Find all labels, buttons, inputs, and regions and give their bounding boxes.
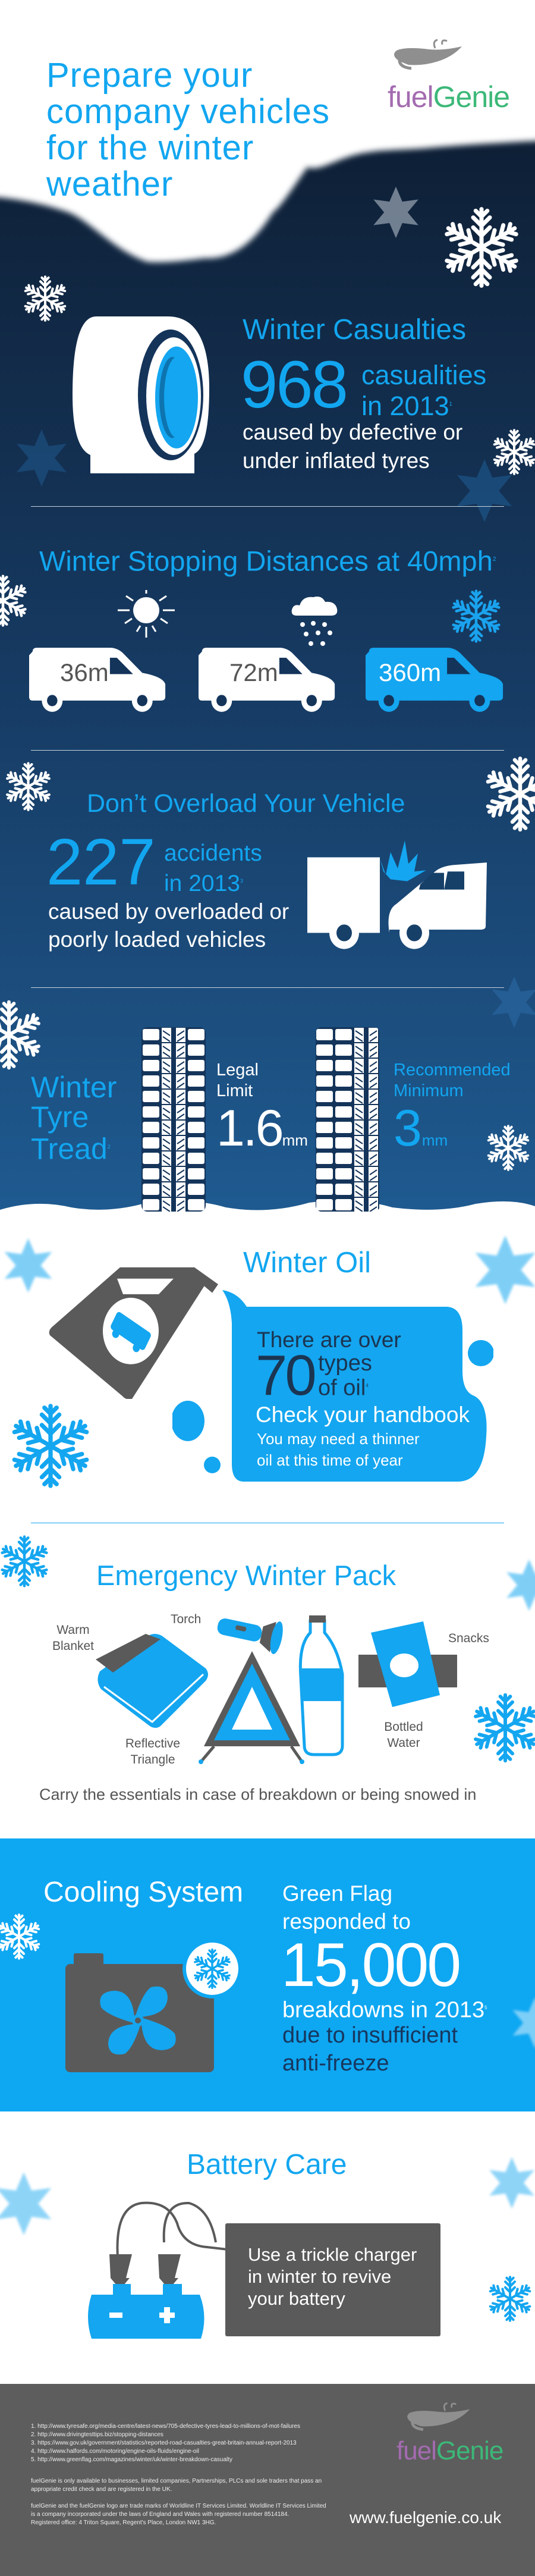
icon: van 36m: 36m (60, 658, 109, 686)
heading: winter oil: Winter Oil (243, 1247, 371, 1279)
text: legal limit (216, 1060, 308, 1157)
panel: overload stat (46, 826, 289, 952)
callout: oil speech bubble: Check your handbook (256, 1402, 470, 1427)
text: legal notes (31, 2478, 326, 2526)
panel: winter casualties text (241, 314, 486, 473)
title: company vehicles (46, 92, 330, 131)
panel: overload stat: in 20133 (164, 871, 243, 896)
background: cloud and decorative snowflakes (0, 0, 535, 1213)
heading: winter tyre tread: Tyre (31, 1100, 89, 1134)
icon: tyre (73, 316, 209, 473)
text: green flag stat (281, 1881, 487, 2076)
heading: cooling system title: Cooling System (43, 1877, 243, 1908)
text: recommended minimum: Minimum (394, 1081, 464, 1100)
text: Torch (171, 1612, 201, 1626)
panel: winter casualties text: in 20131 (361, 391, 452, 421)
panel: winter casualties text: Winter Casualties (243, 314, 466, 346)
text: legal limit: Limit (216, 1081, 253, 1100)
text: references: 1. http://www.tyresafe.org/media-centre/latest-news/705-defective-tyres-lead-to-millions-of-mot-failures (31, 2423, 300, 2430)
heading: stopping distances: Winter Stopping Distances at 40mph2 (39, 545, 496, 577)
panel: cooling system (0, 1838, 535, 2111)
icon: van 360m (366, 648, 503, 712)
text: green flag stat: due to insufficient (282, 2023, 458, 2048)
text: green flag stat: Green Flag (282, 1881, 392, 1906)
text: green flag stat: anti-freeze (282, 2051, 389, 2076)
text: Triangle (130, 1753, 175, 1767)
panel: dark winter background (0, 0, 535, 1213)
callout: oil speech bubble: 70 (256, 1344, 314, 1407)
triangle (204, 1651, 300, 1746)
labels: emergency items: Blanket (52, 1639, 94, 1653)
icon: van 72m (199, 648, 335, 712)
icon: van 360m: 360m (379, 658, 441, 686)
text: references: 4. http://www.halfords.com/motoring/engine-oils-fluids/engine-oil (31, 2448, 199, 2455)
text: carry essentials: Carry the essentials in case of breakdown or being snowed in (39, 1786, 476, 1803)
text: legal notes: appropriate credit check and are registered in the UK. (31, 2486, 172, 2493)
text: recommended minimum: Recommended (394, 1060, 511, 1080)
panel: winter casualties text: under inflated tyres (243, 448, 430, 473)
icon: van 36m (29, 648, 165, 712)
snacks (358, 1655, 457, 1687)
icon: van 72m: 72m (229, 658, 278, 686)
logo: footer fuelGenie (396, 2402, 503, 2465)
icon: sun (118, 590, 175, 638)
callout: oil speech bubble: You may need a thinner (257, 1430, 420, 1448)
panel: winter casualties text: caused by defective or (243, 420, 462, 444)
text: Bottled (384, 1720, 423, 1734)
callout: oil speech bubble (172, 1290, 493, 1482)
text: recommended minimum (394, 1060, 511, 1157)
bottle (300, 1621, 342, 1755)
title (46, 56, 330, 203)
callout: trickle charger box: Use a trickle charger (248, 2244, 417, 2265)
text: legal notes: Registered office: 4 Triton Square, Regent's Place, London NW1 3HG. (31, 2519, 216, 2526)
title: Prepare your (46, 56, 253, 95)
panel: overload stat: caused by overloaded or (48, 899, 289, 924)
text: green flag stat: 15,000 (281, 1931, 460, 2000)
text: legal notes: fuelGenie is only available to businesses, limited companies, Partnerships, PLCs and sole traders that pass an (31, 2478, 322, 2484)
text: green flag stat: breakdowns in 20135 (282, 1998, 487, 2023)
heading: battery care: Battery Care (187, 2149, 347, 2180)
logo: fuelGenie: fuelGenie (388, 80, 509, 114)
text: Snacks (448, 1631, 489, 1645)
text: recommended minimum: 3mm (394, 1100, 448, 1157)
callout: oil speech bubble: There are over (257, 1328, 401, 1352)
icon: truck collision (307, 840, 487, 949)
icon group: emergency items (96, 1615, 457, 1764)
callout: trickle charger box (225, 2223, 440, 2336)
logo: footer fuelGenie: fuelGenie (396, 2436, 503, 2465)
heading: emergency winter pack: Emergency Winter Pack (96, 1560, 396, 1591)
callout: oil speech bubble: types (318, 1351, 372, 1376)
snowy edge (0, 1200, 535, 1231)
chart: tyre tread strips (141, 1027, 379, 1212)
panel: overload stat: accidents (164, 840, 262, 866)
callout: trickle charger box: in winter to revive (248, 2266, 391, 2287)
panel: winter casualties text: 968 (241, 347, 347, 422)
panel: overload stat: 227 (46, 826, 156, 899)
text: references: 3. https://www.gov.uk/government/statistics/reported-road-casualties-great-britain-annual-report-2013 (31, 2440, 297, 2446)
panel: winter casualties text: casualities (361, 360, 486, 390)
torch (215, 1609, 285, 1655)
text: legal notes: is a company incorporated under the laws of England and Wales with registered number 8514184. (31, 2511, 289, 2518)
heading: winter tyre tread: Winter (31, 1071, 117, 1104)
blanket (97, 1634, 208, 1728)
background: battery section snowflakes (0, 2157, 535, 2322)
panel: footer (0, 2384, 535, 2576)
icon: battery with jump leads (88, 2202, 225, 2339)
text: references: 2. http://www.drivingtesttips.biz/stopping-distances (31, 2431, 163, 2438)
icon: radiator with fan (65, 1943, 238, 2072)
icon: oil can (49, 1267, 218, 1399)
text: Water (387, 1736, 420, 1750)
panel: overload stat: poorly loaded vehicles (48, 927, 266, 952)
background: white section snowflakes (1, 1235, 535, 1763)
icon: rain cloud (291, 597, 338, 646)
text: legal limit: 1.6mm (216, 1100, 308, 1157)
title: weather (46, 165, 173, 203)
text: legal notes: fuelGenie and the fuelGenie logo are trade marks of Worldline IT Services Limited. Worldline IT Services Limited (31, 2503, 326, 2509)
text: green flag stat: responded to (282, 1909, 411, 1934)
callout: oil speech bubble: of oil4 (318, 1376, 369, 1401)
callout: trickle charger box: your battery (248, 2288, 345, 2309)
text: Reflective (125, 1737, 180, 1750)
text: references: 5. http://www.greenflag.com/magazines/winter/uk/winter-breakdown-casualty (31, 2456, 232, 2463)
text: legal limit: Legal (216, 1060, 259, 1080)
callout: oil speech bubble: oil at this time of year (257, 1451, 403, 1469)
labels: emergency items (52, 1623, 94, 1653)
heading: winter tyre tread: Tread2 (31, 1132, 111, 1166)
labels: emergency items: Warm (56, 1623, 90, 1637)
title: for the winter (46, 128, 254, 167)
text: references (31, 2423, 300, 2463)
heading: don't overload: Don’t Overload Your Vehicle (87, 789, 405, 818)
logo: fuelGenie (388, 39, 509, 114)
text: website: www.fuelgenie.co.uk (350, 2508, 501, 2527)
heading: winter tyre tread (31, 1071, 117, 1166)
